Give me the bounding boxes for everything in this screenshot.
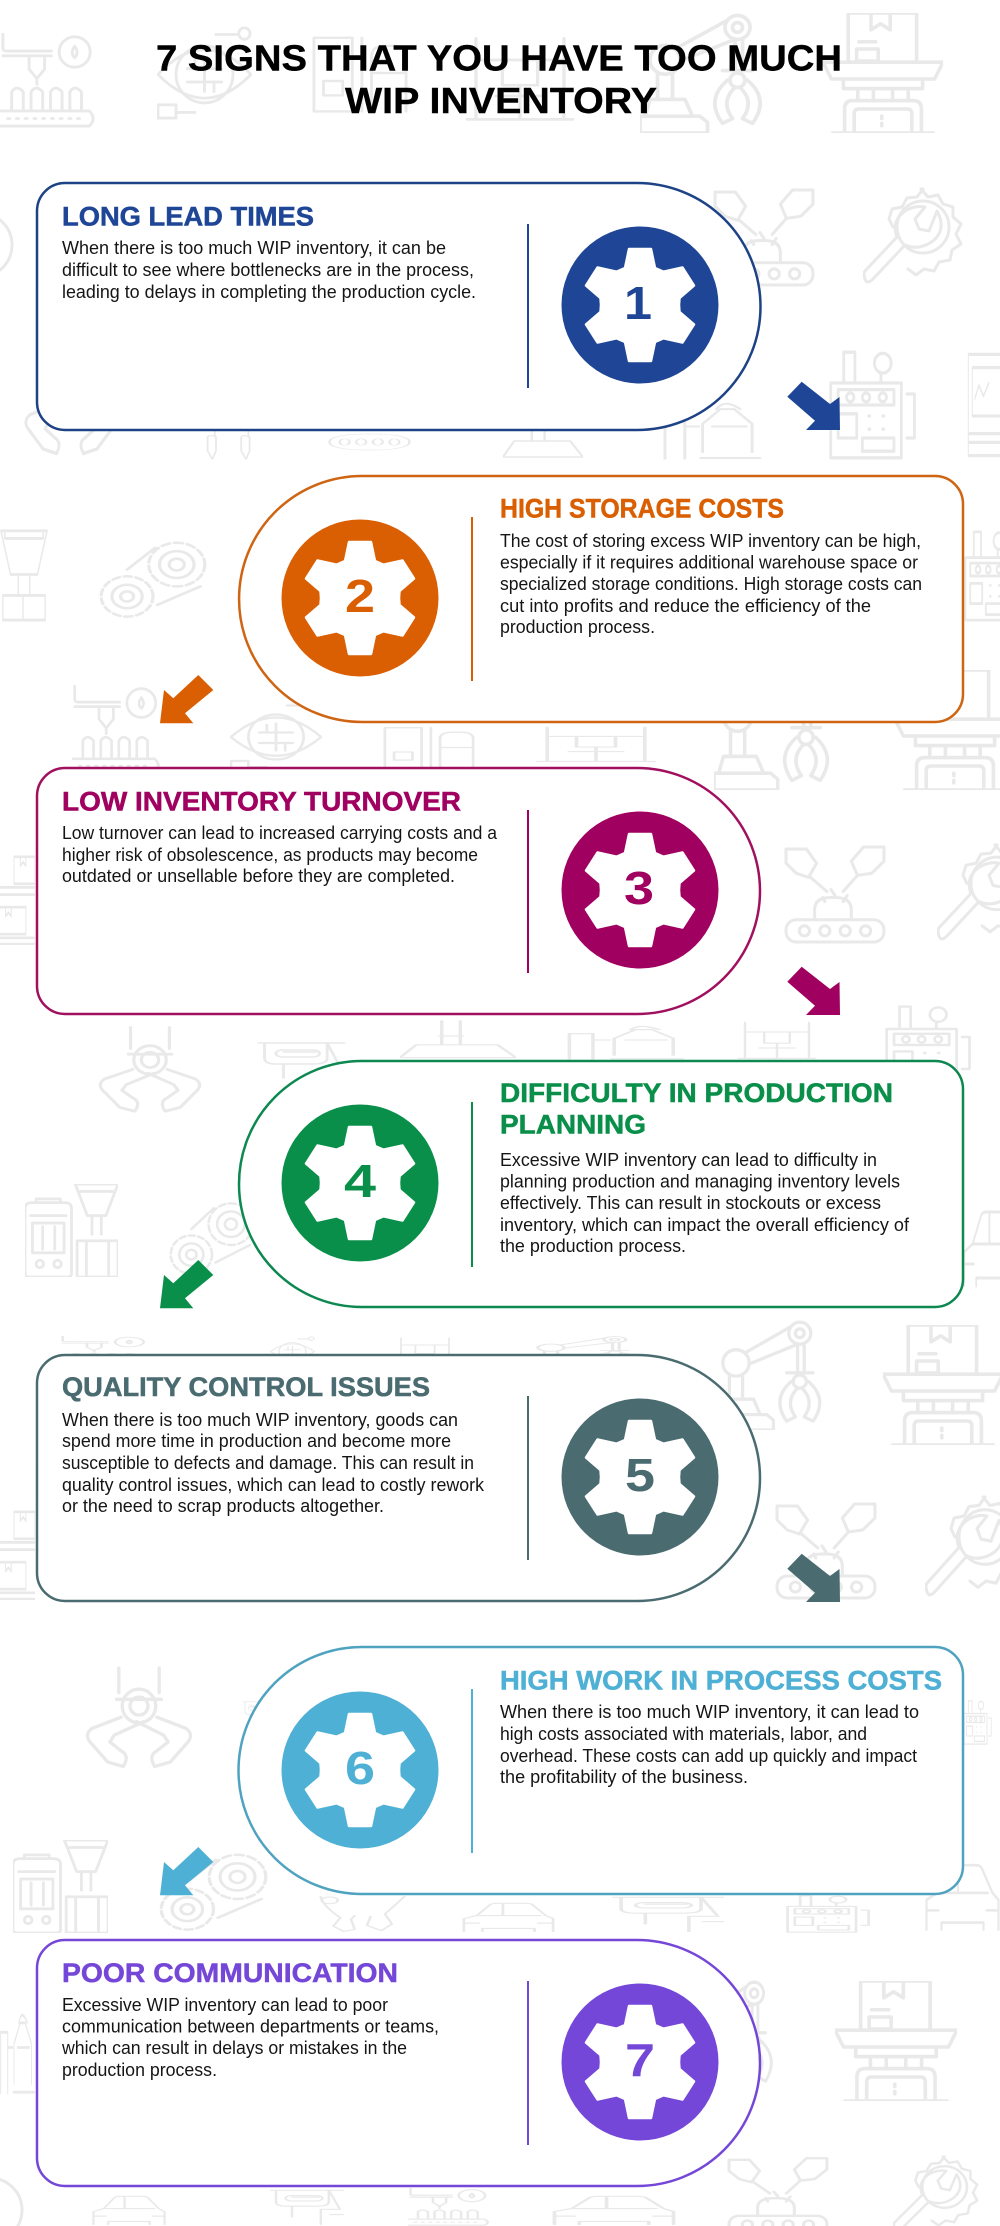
heading: HIGH WORK IN PROCESS COSTS bbox=[500, 1666, 942, 1696]
heading: LONG LEAD TIMES bbox=[62, 202, 314, 232]
divider bbox=[471, 517, 473, 681]
body text: production process. bbox=[62, 2059, 217, 2080]
body text: spend more time in production and become more bbox=[62, 1430, 451, 1451]
body text: especially if it requires additional warehouse space or bbox=[500, 552, 918, 572]
body text: quality control issues, which can lead to costly rework bbox=[62, 1474, 485, 1495]
body text bbox=[500, 1701, 919, 1787]
body text: outdated or unsellable before they are completed. bbox=[62, 865, 455, 886]
panel: low inventory turnover bbox=[37, 768, 760, 1014]
body text: specialized storage conditions. High storage costs can bbox=[500, 573, 922, 594]
icon: numbered gear 3 bbox=[562, 812, 718, 968]
body text: the profitability of the business. bbox=[500, 1766, 748, 1787]
icon: numbered gear 1 bbox=[562, 226, 718, 384]
card outline bbox=[37, 183, 761, 430]
title: 7 SIGNS THAT YOU HAVE TOO MUCH bbox=[156, 38, 842, 78]
heading: DIFFICULTY IN PRODUCTION bbox=[500, 1078, 893, 1108]
body text: overhead. These costs can add up quickly and impact bbox=[500, 1745, 917, 1766]
card outline bbox=[239, 1647, 963, 1894]
body text: inventory, which can impact the overall efficiency of bbox=[500, 1214, 910, 1235]
heading: POOR COMMUNICATION bbox=[62, 1958, 398, 1988]
panel: high storage costs bbox=[239, 476, 963, 722]
panel: difficulty in production planning: PLANNING bbox=[500, 1110, 646, 1140]
body text: effectively. This can result in stockouts or excess bbox=[500, 1192, 881, 1213]
divider bbox=[527, 810, 529, 973]
icon: numbered gear 1: 1 bbox=[624, 277, 652, 329]
arrow: 5 to 6 bbox=[787, 1554, 840, 1602]
panel: long lead times bbox=[37, 183, 761, 430]
body text: planning production and managing inventory levels bbox=[500, 1170, 900, 1192]
body text bbox=[62, 237, 476, 302]
body text: or the need to scrap products altogether. bbox=[62, 1495, 384, 1516]
panel: poor communication bbox=[37, 1940, 760, 2186]
icon: numbered gear 4 bbox=[282, 1104, 438, 1262]
body text bbox=[62, 1409, 485, 1516]
divider bbox=[527, 224, 529, 388]
icon: numbered gear 6 bbox=[282, 1692, 438, 1848]
body text bbox=[500, 530, 922, 637]
divider bbox=[527, 1396, 529, 1560]
card outline bbox=[37, 1940, 760, 2186]
body text: which can result in delays or mistakes in the bbox=[61, 2037, 407, 2058]
arrow: 1 to 2 bbox=[787, 382, 840, 430]
card outline bbox=[37, 768, 760, 1014]
arrow: 3 to 4 bbox=[787, 967, 840, 1015]
heading: HIGH STORAGE COSTS bbox=[500, 494, 784, 524]
body text: susceptible to defects and damage. This can result in bbox=[62, 1452, 474, 1473]
body text: When there is too much WIP inventory, goods can bbox=[62, 1409, 458, 1430]
body text bbox=[500, 1149, 910, 1256]
body text: When there is too much WIP inventory, it can lead to bbox=[500, 1701, 919, 1722]
icon: numbered gear 2 bbox=[282, 520, 438, 676]
body text: cut into profits and reduce the efficiency of the bbox=[500, 595, 871, 616]
icon: numbered gear 7: 7 bbox=[625, 2034, 655, 2086]
body text: When there is too much WIP inventory, it can be bbox=[62, 237, 446, 258]
body text: production process. bbox=[500, 616, 655, 637]
arrow: 4 to 5 bbox=[160, 1260, 213, 1308]
icon: numbered gear 7 bbox=[562, 1984, 718, 2140]
body text: high costs associated with materials, labor, and bbox=[500, 1723, 867, 1744]
icon: numbered gear 3: 3 bbox=[624, 862, 654, 914]
card outline bbox=[239, 476, 963, 722]
icon: numbered gear 5: 5 bbox=[625, 1449, 655, 1501]
panel: high work in process costs bbox=[239, 1647, 963, 1894]
divider bbox=[471, 1689, 473, 1853]
body text: the production process. bbox=[500, 1235, 686, 1256]
title bbox=[156, 38, 842, 121]
body text: higher risk of obsolescence, as products may become bbox=[62, 844, 478, 865]
panel: difficulty in production planning bbox=[239, 1061, 963, 1307]
body text: Excessive WIP inventory can lead to difficulty in bbox=[500, 1149, 877, 1170]
icon: numbered gear 2: 2 bbox=[345, 570, 375, 622]
heading: QUALITY CONTROL ISSUES bbox=[62, 1372, 430, 1402]
arrow: 2 to 3 bbox=[160, 675, 213, 723]
heading: LOW INVENTORY TURNOVER bbox=[62, 786, 461, 816]
divider bbox=[471, 1102, 473, 1267]
body text: difficult to see where bottlenecks are in the process, bbox=[62, 259, 474, 280]
body text: leading to delays in completing the production cycle. bbox=[62, 281, 476, 302]
card outline bbox=[37, 1355, 760, 1601]
body text: Excessive WIP inventory can lead to poor bbox=[62, 1994, 388, 2015]
icon: numbered gear 6: 6 bbox=[345, 1742, 375, 1794]
body text: The cost of storing excess WIP inventory can be high, bbox=[500, 530, 921, 551]
icon: numbered gear 5 bbox=[562, 1398, 718, 1556]
panel: quality control issues bbox=[37, 1355, 760, 1601]
body text: communication between departments or teams, bbox=[62, 2016, 439, 2036]
arrow: 6 to 7 bbox=[160, 1847, 213, 1895]
title: WIP INVENTORY bbox=[345, 80, 657, 121]
body text bbox=[62, 822, 498, 886]
card outline bbox=[239, 1061, 963, 1307]
icon: numbered gear 4: 4 bbox=[344, 1155, 377, 1207]
divider bbox=[527, 1981, 529, 2145]
body text: Low turnover can lead to increased carrying costs and a bbox=[62, 822, 498, 843]
body text bbox=[61, 1994, 439, 2080]
